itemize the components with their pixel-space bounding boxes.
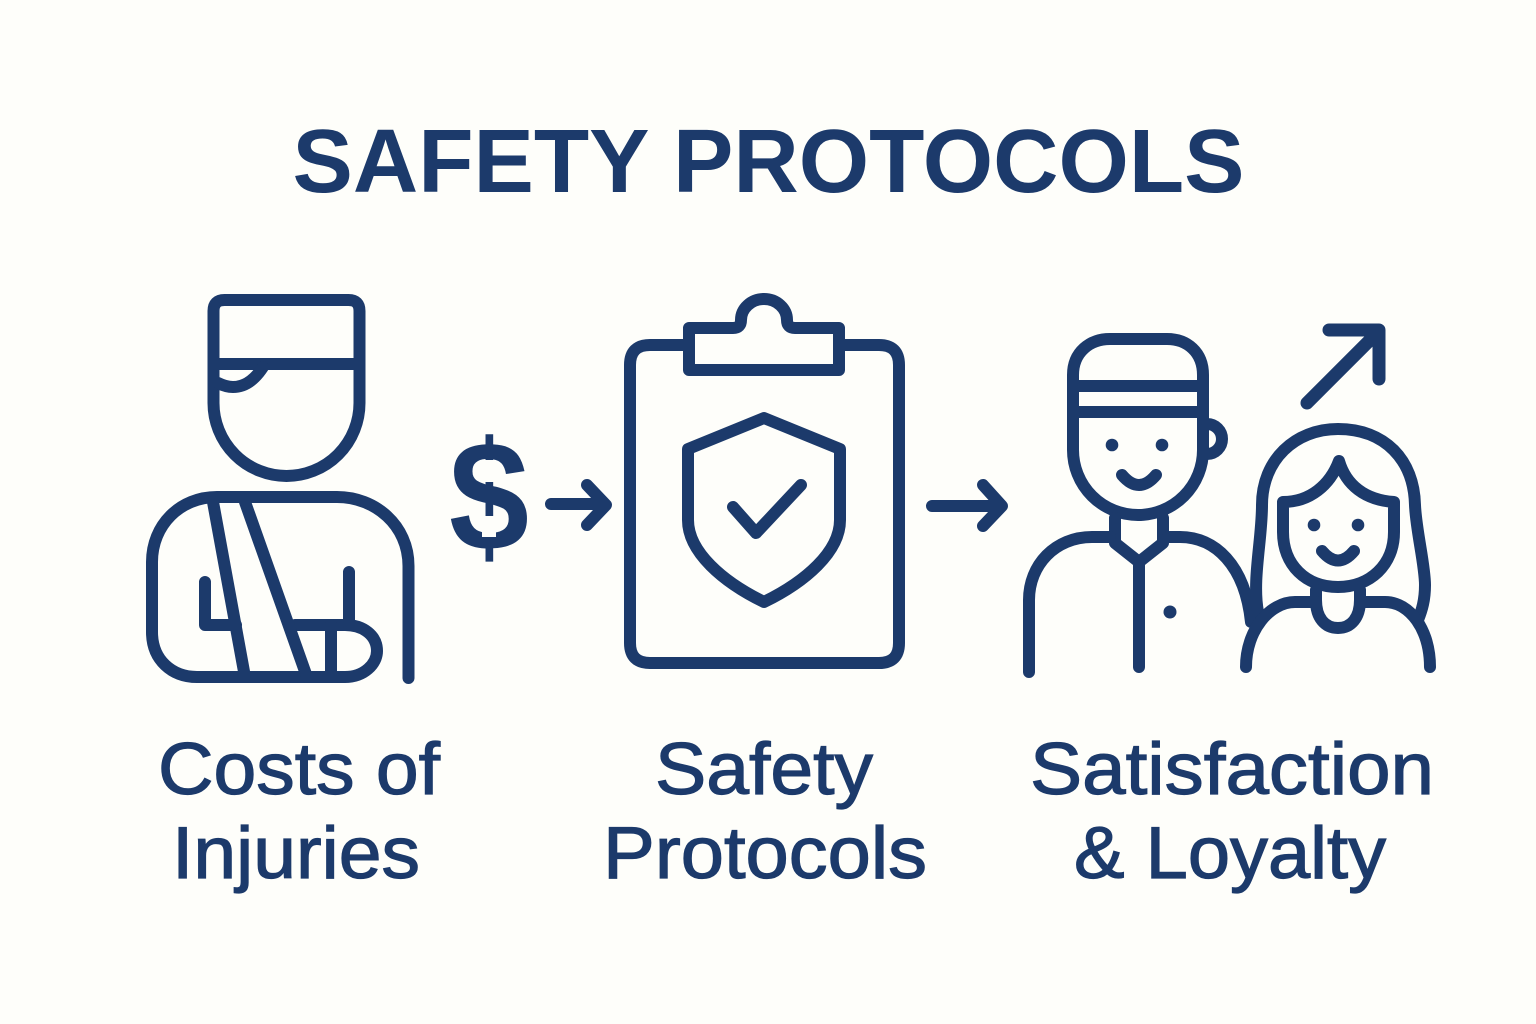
icon: woman face details (1308, 519, 1364, 531)
arrow: costs to protocols (551, 485, 606, 525)
title: SAFETY PROTOCOLS (292, 112, 1244, 212)
label: costs of injuries: Injuries (172, 813, 420, 894)
label: safety protocols: Protocols (603, 813, 927, 894)
arrow: upward trend (1307, 330, 1379, 403)
label: satisfaction and loyalty: & Loyalty (1074, 813, 1387, 894)
label: satisfaction and loyalty (1030, 729, 1434, 894)
icon: satisfied woman (1246, 429, 1430, 667)
label: costs of injuries (158, 729, 441, 894)
label: costs of injuries: Costs of (158, 729, 441, 810)
label: safety protocols (603, 729, 927, 894)
icon: clipboard with shield (630, 299, 899, 663)
label: satisfaction and loyalty: Satisfaction (1030, 729, 1434, 810)
icon: satisfied man (1029, 339, 1251, 672)
icon: injured worker (152, 300, 408, 678)
arrow: protocols to satisfaction (932, 485, 1002, 526)
icon: man face details (1106, 439, 1176, 618)
icon: dollar sign: $ (449, 410, 529, 584)
label: safety protocols: Safety (655, 729, 874, 810)
